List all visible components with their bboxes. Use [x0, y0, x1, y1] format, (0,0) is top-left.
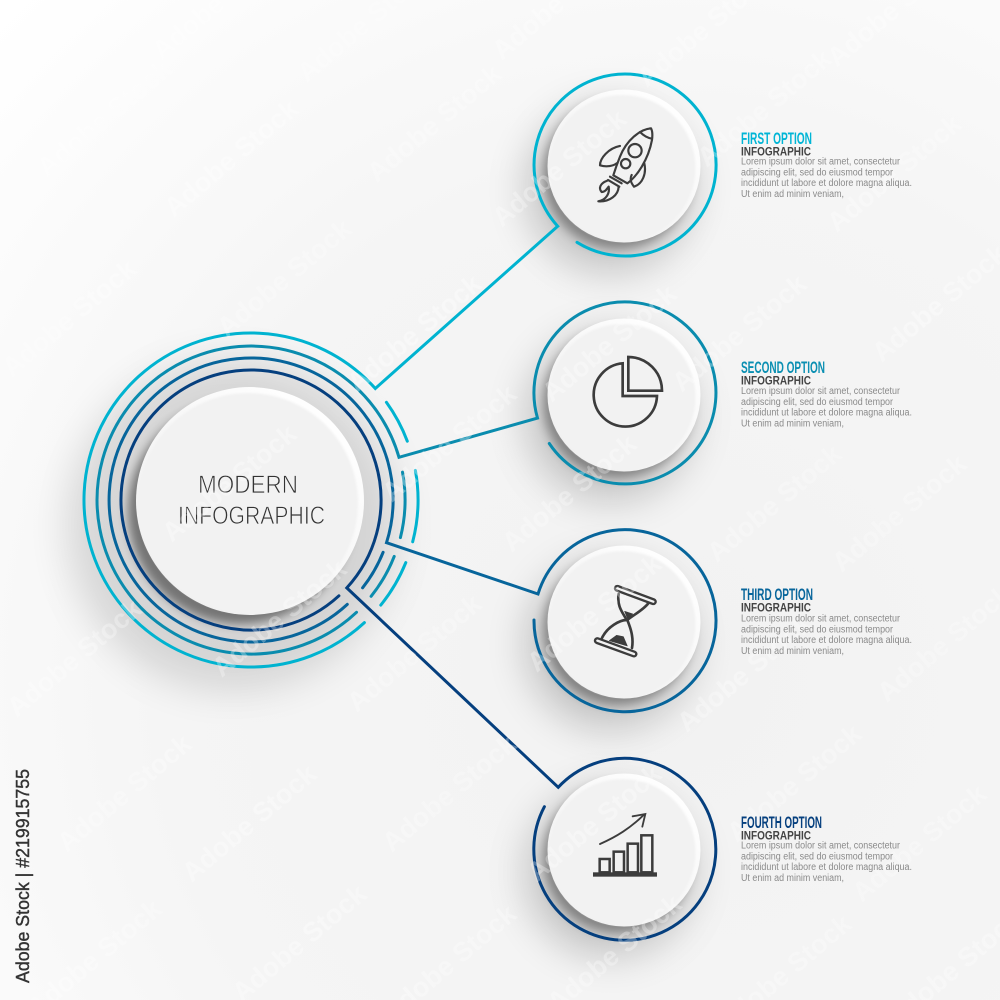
watermark pattern: Adobe Stock — [361, 58, 508, 188]
watermark pattern: Adobe Stock — [826, 448, 973, 578]
text block: third option: incididunt ut labore et dolore magna aliqua. — [741, 635, 912, 646]
text block: third option: adipiscing elit, sed do eiusmod tempor — [741, 624, 894, 635]
text block: first option: FIRST OPTION — [741, 130, 812, 148]
watermark pattern: Adobe Stock — [486, 103, 633, 233]
watermark pattern: Adobe Stock — [211, 213, 358, 343]
watermark pattern: Adobe Stock — [158, 93, 305, 223]
watermark pattern: Adobe Stock — [721, 718, 868, 848]
watermark pattern: Adobe Stock — [1, 593, 148, 723]
central title: MODERN — [198, 471, 298, 499]
icon: pie chart — [594, 357, 662, 427]
watermark pattern: Adobe Stock — [376, 378, 523, 508]
text block: first option: INFOGRAPHIC — [741, 146, 811, 158]
text block: second option: adipiscing elit, sed do eiusmod tempor — [741, 397, 894, 408]
stock id label: Adobe Stock | #219915755 — [13, 769, 33, 983]
text block: third option — [741, 586, 912, 657]
text block: fourth option: FOURTH OPTION — [741, 814, 822, 832]
disc: fourth option — [548, 774, 700, 926]
text block: first option: Ut enim ad minim veniam, — [741, 189, 844, 200]
watermark pattern: Adobe Stock — [846, 778, 993, 908]
watermark pattern: Adobe Stock — [341, 588, 488, 718]
text block: first option: adipiscing elit, sed do eiusmod tempor — [741, 167, 894, 178]
text block: fourth option: Ut enim ad minim veniam, — [741, 873, 844, 884]
connector ring: third option — [109, 358, 716, 712]
watermark pattern: Adobe Stock — [521, 548, 668, 678]
connector ring: first option — [84, 74, 716, 667]
watermark pattern: Adobe Stock — [51, 728, 198, 858]
disc: second option — [548, 318, 700, 472]
text block: third option: Lorem ipsum dolor sit amet, consectetur — [741, 614, 901, 624]
soft shadows — [67, 99, 694, 956]
text block: fourth option: Lorem ipsum dolor sit amet, consectetur — [741, 840, 901, 852]
watermark pattern: Adobe Stock — [701, 438, 848, 568]
text block: first option — [741, 130, 912, 200]
watermark pattern: Adobe Stock — [821, 108, 968, 238]
text block: second option: Lorem ipsum dolor sit amet, consectetur — [741, 386, 901, 397]
connector ring: fourth option — [121, 370, 716, 940]
watermark pattern: Adobe Stock — [0, 253, 143, 383]
watermark pattern: Adobe Stock — [341, 268, 488, 398]
text block: third option: THIRD OPTION — [741, 586, 813, 604]
connector ring: second option — [97, 302, 716, 654]
icon: growth bar chart — [593, 814, 657, 877]
text block: fourth option: incididunt ut labore et dolore magna aliqua. — [741, 862, 912, 873]
watermark pattern: Adobe Stock — [536, 278, 683, 408]
central disc — [136, 387, 364, 615]
text block: third option: Ut enim ad minim veniam, — [741, 646, 844, 657]
text block: first option: Lorem ipsum dolor sit amet, consectetur — [741, 156, 901, 168]
watermark pattern: Adobe Stock — [691, 43, 838, 173]
text block: second option: Ut enim ad minim veniam, — [741, 418, 844, 429]
text block: second option — [741, 359, 912, 429]
watermark pattern: Adobe Stock — [376, 728, 523, 858]
text block: fourth option: INFOGRAPHIC — [741, 830, 811, 842]
icon: rocket — [598, 128, 652, 201]
text block: second option: incididunt ut labore et dolore magna aliqua. — [741, 408, 912, 418]
disc: first option — [548, 90, 700, 242]
central title — [178, 471, 325, 530]
watermark pattern: Adobe Stock — [666, 268, 813, 398]
watermark pattern: Adobe Stock — [496, 428, 643, 558]
disc: third option — [548, 546, 700, 698]
text block: first option: incididunt ut labore et dolore magna aliqua. — [741, 178, 912, 189]
central title: INFOGRAPHIC — [178, 502, 325, 530]
text block: fourth option — [741, 814, 912, 884]
watermark pattern: Adobe Stock — [206, 553, 353, 683]
text block: fourth option: adipiscing elit, sed do eiusmod tempor — [741, 851, 894, 862]
icon: hourglass — [597, 588, 653, 654]
watermark pattern: Adobe Stock — [521, 758, 668, 888]
watermark pattern: Adobe Stock — [176, 758, 323, 888]
watermark pattern: Adobe Stock — [31, 53, 178, 183]
watermark pattern: Adobe Stock — [671, 608, 818, 738]
text block: third option: INFOGRAPHIC — [741, 602, 811, 614]
text block: second option: INFOGRAPHIC — [741, 376, 811, 388]
watermark pattern: Adobe Stock — [156, 418, 303, 548]
text block: second option: SECOND OPTION — [741, 359, 825, 377]
